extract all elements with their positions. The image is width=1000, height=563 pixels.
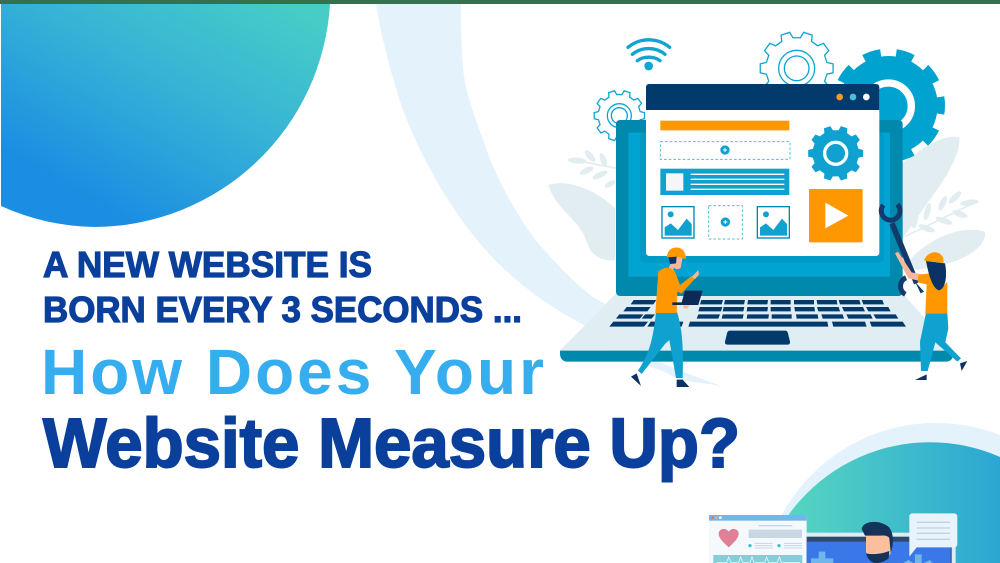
pale outer circle	[764, 423, 1000, 563]
worker with wrench	[881, 204, 967, 380]
dashed banner placeholder	[660, 142, 790, 159]
heading line 3: How Does Your	[41, 336, 544, 408]
window dots	[836, 94, 843, 100]
bars	[903, 554, 933, 563]
icon: outline gear left	[594, 91, 644, 141]
text: headline block	[41, 244, 740, 482]
shoes	[915, 361, 967, 380]
bearded man	[862, 522, 893, 563]
icon: outline gear top	[760, 32, 834, 84]
illustration: health monitoring, bottom right	[709, 513, 957, 563]
hair	[926, 261, 946, 290]
icon: wifi	[628, 40, 670, 70]
shoes	[631, 373, 689, 387]
bottom right decorative circles	[764, 423, 1000, 563]
health browser card	[709, 515, 807, 563]
keyboard	[609, 300, 906, 327]
browser window	[646, 84, 879, 256]
medical cross	[811, 552, 833, 563]
blue text panel	[660, 169, 789, 195]
orange heading bar	[660, 121, 789, 130]
legs	[638, 312, 683, 378]
illustration: laptop with construction workers	[548, 32, 985, 387]
pale blue sweeping arc	[376, 4, 722, 386]
laptop base	[560, 293, 953, 362]
gradient inner circle	[764, 442, 1000, 563]
torso	[655, 268, 694, 313]
torso	[918, 273, 947, 314]
helmet	[924, 252, 944, 263]
heading line 1: A NEW WEBSITE IS	[43, 244, 372, 285]
background: top green bar	[0, 0, 1000, 4]
icon: large solid gear	[836, 53, 941, 158]
tablet	[672, 291, 703, 305]
wrench	[881, 204, 917, 294]
image placeholder left	[662, 207, 694, 238]
text lines	[758, 524, 792, 528]
heading line 2: BORN EVERY 3 SECONDS ...	[43, 289, 522, 330]
arm	[895, 252, 927, 282]
heading line 4: Website Measure Up?	[43, 404, 740, 482]
speech bubble	[909, 513, 957, 557]
icon: window gear	[808, 126, 863, 181]
icon: background leaves	[548, 137, 985, 270]
trackpad	[725, 331, 790, 345]
title bar	[646, 84, 879, 110]
worker with tablet	[631, 247, 720, 387]
legs	[920, 313, 961, 371]
image placeholder right	[757, 207, 789, 238]
icon: video play tile	[809, 189, 863, 242]
ecg strip	[713, 555, 802, 563]
dashed placeholder	[709, 206, 742, 239]
face and hand	[667, 257, 699, 279]
helmet	[667, 247, 686, 259]
decorative teal-blue circle top left	[1, 4, 330, 227]
laptop screen	[616, 120, 903, 296]
heart	[719, 529, 739, 547]
monitor	[807, 533, 956, 563]
